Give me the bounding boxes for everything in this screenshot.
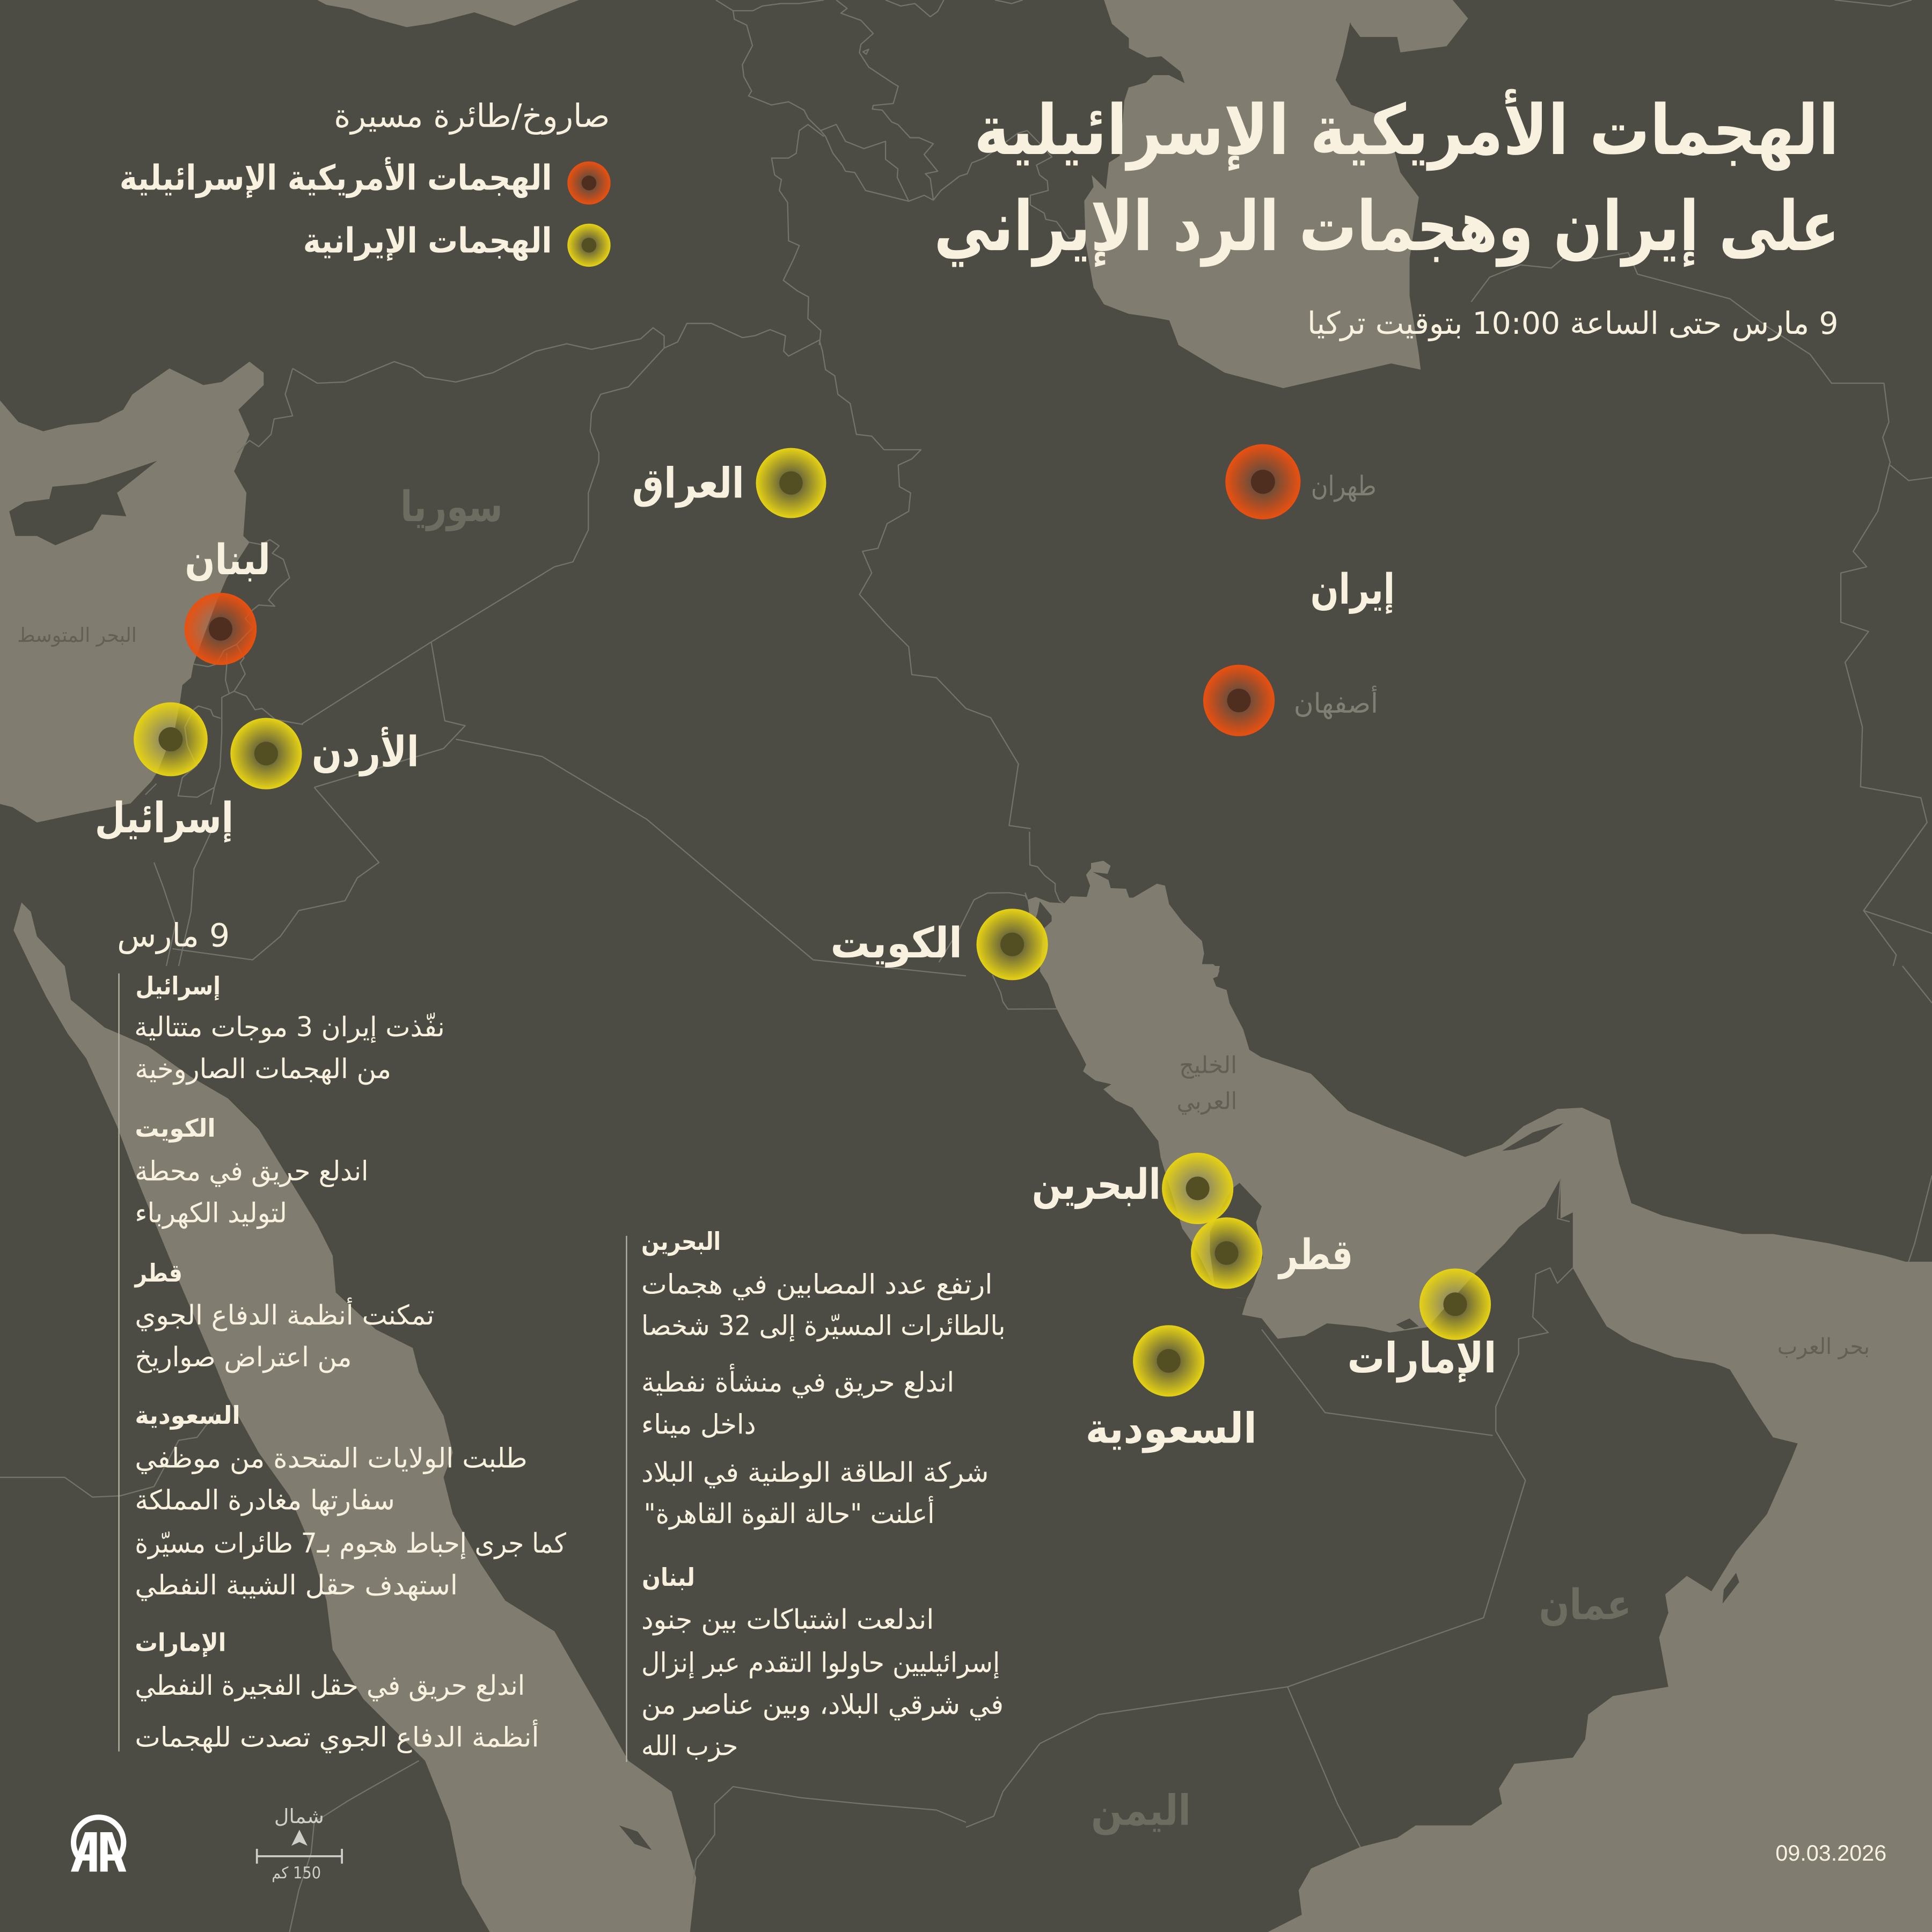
Israel entry: نفّذت إيران 3 موجات متتالية	[134, 1011, 445, 1043]
labels: sea names: الخليج	[1179, 1052, 1237, 1079]
labels: attacked countries: الأردن	[312, 727, 419, 777]
UAE entry: أنظمة الدفاع الجوي تصدت للهجمات	[135, 1719, 539, 1753]
marker: Bahrain	[1162, 1153, 1233, 1224]
Bahrain entry	[641, 1227, 1005, 1530]
title	[934, 89, 1840, 267]
marker: Iraq	[756, 448, 826, 518]
scale label: 150 كم	[272, 1864, 321, 1883]
sea: Black Sea	[317, 0, 579, 27]
icon: north arrow	[291, 1829, 308, 1846]
labels: gray countries	[400, 483, 1631, 1835]
map: islands and peninsulas	[9, 461, 1739, 1850]
north label: شمال	[274, 1805, 324, 1828]
labels: attacked countries: السعودية	[1086, 1405, 1257, 1453]
compass and scale bar	[257, 1805, 342, 1883]
Saudi Arabia entry: سفارتها مغادرة المملكة	[135, 1484, 395, 1516]
island: Cyprus	[9, 461, 157, 545]
marker: Qatar	[1191, 1217, 1262, 1289]
UAE entry: الإمارات	[135, 1628, 226, 1657]
marker: Israel	[134, 702, 208, 776]
Qatar entry: قطر	[134, 1258, 182, 1287]
labels: attacked countries: العراق	[632, 460, 744, 508]
labels: gray countries: اليمن	[1091, 1787, 1191, 1835]
Lebanon entry: إسرائيليين حاولوا التقدم عبر إنزال	[641, 1647, 1000, 1679]
subtitle: 9 مارس حتى الساعة 10:00 بتوقيت تركيا	[1307, 305, 1839, 341]
labels: sea names	[17, 624, 1870, 1359]
Bahrain entry: اندلع حريق في منشأة نفطية	[641, 1364, 954, 1399]
peninsula: Qatar	[1210, 1183, 1263, 1299]
sea: Mediterranean	[0, 362, 264, 823]
labels: attacked countries: الكويت	[830, 919, 962, 968]
labels: attacked countries: الإمارات	[1348, 1335, 1496, 1384]
panel: right news column	[626, 1227, 1005, 1762]
date: 09.03.2026	[1775, 1841, 1886, 1865]
island: Qeshm	[1502, 1123, 1564, 1151]
labels: gray countries: سوريا	[400, 483, 503, 531]
labels: attacked countries	[95, 460, 1496, 1453]
marker: Jordan	[230, 718, 302, 789]
Kuwait entry: الكويت	[135, 1114, 216, 1143]
islands: Dahlak	[619, 1825, 652, 1850]
Bahrain entry: البحرين	[641, 1227, 721, 1256]
labels: sea names: البحر المتوسط	[17, 624, 137, 647]
sea: Northern Gulf head	[1028, 861, 1219, 984]
Saudi Arabia entry	[135, 1401, 567, 1601]
labels: attacked countries: البحرين	[1032, 1161, 1161, 1209]
labels: sea names: بحر العرب	[1777, 1334, 1870, 1359]
Saudi Arabia entry: طلبت الولايات المتحدة من موظفي	[135, 1442, 528, 1474]
Lebanon entry: اندلعت اشتباكات بين جنود	[641, 1604, 934, 1636]
Lebanon entry	[641, 1563, 1004, 1762]
Israel entry: إسرائيل	[136, 971, 221, 1001]
Israel entry: من الهجمات الصاروخية	[135, 1053, 391, 1085]
legend item: Iranian strikes: الهجمات الإيرانية	[303, 221, 552, 261]
Lebanon entry: في شرقي البلاد، وبين عناصر من	[641, 1689, 1004, 1721]
labels: Iranian cities: أصفهان	[1294, 685, 1378, 720]
marker: Saudi Arabia	[1133, 1325, 1204, 1396]
labels: gray countries: عمان	[1539, 1581, 1631, 1629]
marker: UAE	[1419, 1269, 1491, 1340]
island: Bubiyan	[1034, 902, 1052, 928]
Kuwait entry	[135, 1114, 368, 1230]
sea: Kara-Bogaz	[1343, 0, 1468, 53]
marker: Tehran	[1225, 444, 1300, 519]
marker: Lebanon	[185, 593, 257, 665]
legend item: US-Israeli strikes: الهجمات الأمريكية الإسرائيلية	[120, 157, 552, 199]
Israel entry	[134, 971, 445, 1085]
sea: Gulf of Suez	[13, 903, 65, 966]
labels: attacked countries: إسرائيل	[95, 794, 233, 843]
labels: Iranian cities	[1294, 470, 1378, 720]
sea: Caspian	[1084, 0, 1421, 388]
Bahrain entry: شركة الطاقة الوطنية في البلاد	[641, 1457, 989, 1489]
Bahrain entry: بالطائرات المسيّرة إلى 32 شخصا	[641, 1310, 1005, 1342]
labels: attacked countries: قطر	[1277, 1231, 1353, 1279]
UAE entry: اندلع حريق في حقل الفجيرة النفطي	[135, 1670, 525, 1702]
labels: attacked countries: لبنان	[185, 536, 270, 584]
Kuwait entry: اندلع حريق في محطة	[135, 1155, 368, 1187]
labels: attacked countries: إيران	[1311, 566, 1395, 614]
legend heading: صاروخ/طائرة مسيرة	[334, 98, 610, 135]
labels: sea names: العربي	[1177, 1088, 1237, 1115]
Saudi Arabia entry: استهدف حقل الشيبة النفطي	[135, 1569, 458, 1601]
panel: left news column	[118, 971, 567, 1753]
Lebanon entry: حزب الله	[641, 1730, 738, 1762]
Qatar entry: من اعتراض صواريخ	[135, 1341, 352, 1373]
Qatar entry: تمكنت أنظمة الدفاع الجوي	[135, 1297, 434, 1331]
Kuwait entry: لتوليد الكهرباء	[135, 1197, 287, 1230]
Lebanon entry: لبنان	[642, 1563, 695, 1592]
date heading: 9 مارس	[117, 917, 230, 954]
legend	[120, 98, 611, 267]
island: Abu Dhabi	[1396, 1319, 1419, 1329]
UAE entry	[135, 1628, 539, 1753]
Saudi Arabia entry: كما جرى إحباط هجوم بـ7 طائرات مسيّرة	[135, 1527, 567, 1560]
Saudi Arabia entry: السعودية	[135, 1401, 240, 1430]
island: Masirah	[1723, 1573, 1739, 1604]
scale bar	[257, 1849, 342, 1864]
labels: Iranian cities: طهران	[1311, 470, 1377, 502]
marker: Kuwait	[977, 909, 1048, 980]
icon: AA logo	[71, 1817, 126, 1872]
Bahrain entry: أعلنت "حالة القوة القاهرة"	[644, 1496, 934, 1530]
sea: Red Sea	[31, 966, 696, 1932]
marker: Isfahan	[1203, 665, 1275, 736]
sea: Gulf and Arabian Sea	[1040, 966, 1932, 1932]
Qatar entry	[134, 1258, 434, 1373]
Bahrain entry: ارتفع عدد المصابين في هجمات	[641, 1269, 992, 1301]
Bahrain entry: داخل ميناء	[641, 1408, 756, 1440]
